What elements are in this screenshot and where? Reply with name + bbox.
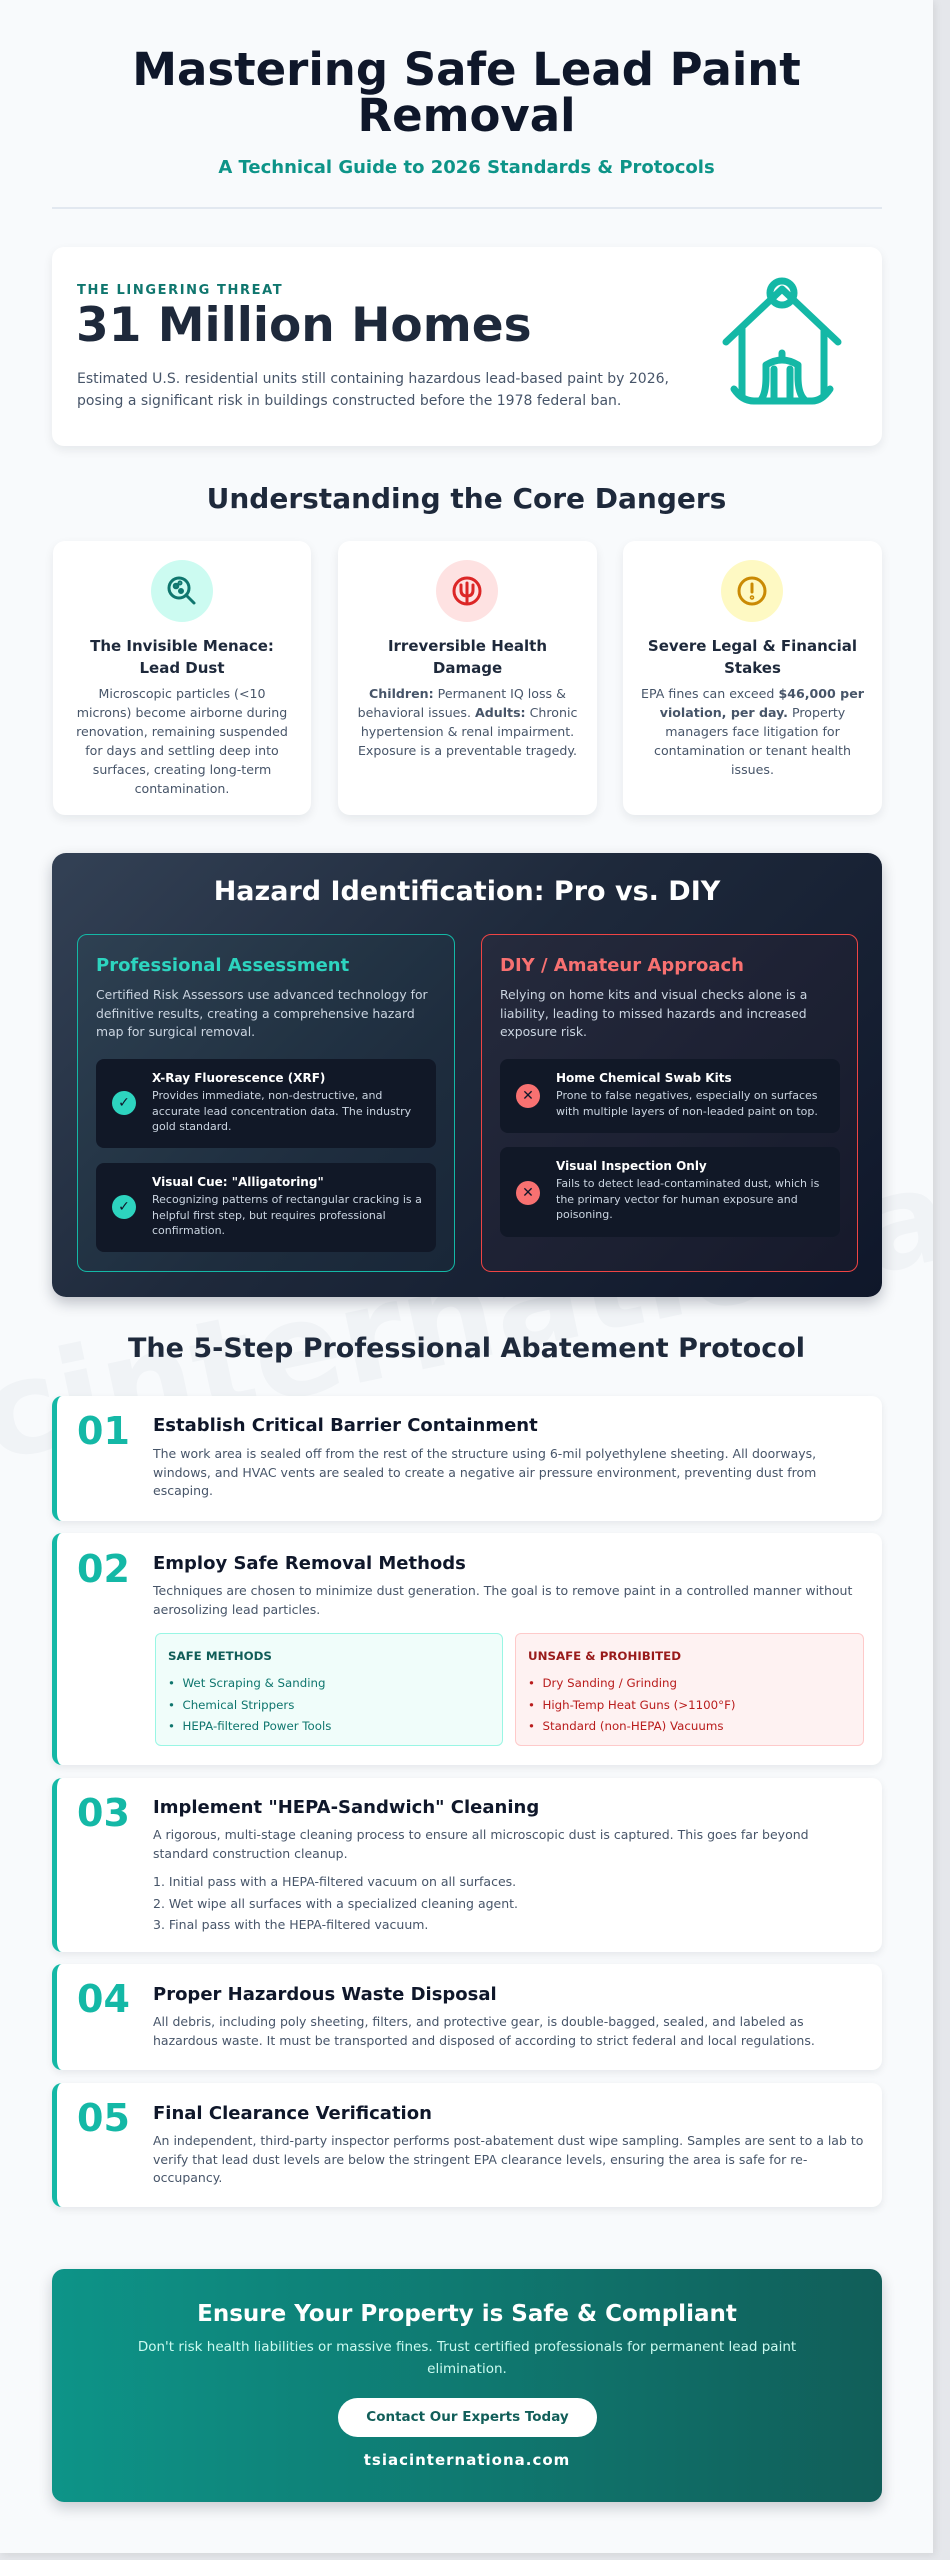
item: swab kits: ✕: [522, 1088, 534, 1104]
panel: threat stat: [52, 247, 882, 446]
step 01: Establish Critical Barrier Containment: [153, 1415, 538, 1436]
step 02: [52, 1533, 882, 1765]
item: XRF: ✓: [118, 1095, 130, 1111]
icon: house: [722, 278, 842, 404]
title: [132, 43, 801, 142]
subtitle: A Technical Guide to 2026 Standards & Protocols: [218, 157, 715, 178]
step 05: 05: [77, 2096, 130, 2140]
step 04: All debris, including poly sheeting, filters, and protective gear, is double-bagged, sealed, and labeled as hazardous waste. It must be transported and disposed of according to strict federal and local regulations.: [153, 2014, 815, 2048]
button: Contact Our Experts Today: [366, 2409, 569, 2425]
step 02: Employ Safe Removal Methods: [153, 1553, 466, 1574]
item: visual inspection: Fails to detect lead-contaminated dust, which is the primary vector for human exposure and poisoning.: [556, 1177, 819, 1221]
step 03: [52, 1778, 882, 1952]
column: DIY: [481, 934, 858, 1272]
title: The Invisible Menace:: [90, 637, 274, 655]
step 02: Techniques are chosen to minimize dust generation. The goal is to remove paint in a controlled manner without aerosolizing lead particles.: [153, 1583, 852, 1617]
panel: hazard identification: [52, 853, 882, 1297]
title: Mastering Safe Lead Paint: [132, 43, 801, 96]
label: THE LINGERING THREAT: [77, 283, 283, 298]
box: unsafe methods: • Dry Sanding / Grinding: [528, 1676, 677, 1690]
url: tsiacinternationa.com: [364, 2451, 570, 2469]
step 04: 04: [77, 1977, 130, 2021]
box: safe methods: • Wet Scraping & Sanding: [168, 1676, 325, 1690]
box: safe methods: SAFE METHODS: [168, 1649, 272, 1663]
title: [90, 637, 274, 677]
title: Damage: [433, 659, 502, 677]
item: alligatoring: [96, 1163, 436, 1252]
item: visual inspection: [500, 1147, 840, 1237]
item: visual inspection: ✕: [522, 1185, 534, 1201]
step 03: 03: [77, 1791, 130, 1835]
title: Severe Legal & Financial: [648, 637, 857, 655]
step 03: 2. Wet wipe all surfaces with a specialized cleaning agent.: [153, 1896, 518, 1911]
title: Irreversible Health: [388, 637, 547, 655]
item: alligatoring: ✓: [118, 1199, 130, 1215]
item: XRF: Provides immediate, non-destructive, and accurate lead concentration data. The industry gold standard.: [152, 1089, 411, 1133]
title: [648, 637, 857, 677]
item: swab kits: Home Chemical Swab Kits: [556, 1071, 732, 1085]
title: Stakes: [724, 659, 781, 677]
step 01: [52, 1396, 882, 1521]
text: Certified Risk Assessors use advanced technology for definitive results, creating a comprehensive hazard map for surgical removal.: [96, 987, 428, 1039]
box: safe methods: • HEPA-filtered Power Tools: [168, 1719, 331, 1733]
item: visual inspection: Visual Inspection Only: [556, 1159, 707, 1173]
box: unsafe methods: UNSAFE & PROHIBITED: [528, 1649, 681, 1663]
description: Estimated U.S. residential units still containing hazardous lead-based paint by 2026, posing a significant risk in buildings constructed before the 1978 federal ban.: [77, 371, 669, 409]
item: XRF: [96, 1059, 436, 1148]
icon: magnifier: [151, 560, 213, 622]
step 03: 1. Initial pass with a HEPA-filtered vacuum on all surfaces.: [153, 1874, 516, 1889]
heading: core dangers: Understanding the Core Dangers: [207, 482, 726, 515]
call to action: [52, 2269, 882, 2502]
title: [388, 637, 547, 677]
button: [338, 2398, 597, 2437]
step 05: An independent, third-party inspector performs post-abatement dust wipe sampling. Samples are sent to a lab to verify that lead dust levels are below the stringent EPA clearance levels, ensuring the area is safe for re-occupancy.: [153, 2133, 863, 2185]
step 02: 02: [77, 1547, 130, 1591]
CTA text: Don't risk health liabilities or massive fines. Trust certified professionals for permanent lead paint elimination.: [138, 2339, 796, 2377]
box: unsafe methods: • High-Temp Heat Guns (>1100°F): [528, 1698, 735, 1712]
step 01: The work area is sealed off from the rest of the structure using 6-mil polyethylene sheeting. All doorways, windows, and HVAC vents are sealed to create a negative air pressure environment, preventing dust from escaping.: [153, 1446, 816, 1498]
item: swab kits: Prone to false negatives, especially on surfaces with multiple layers of non-leaded paint on top.: [556, 1089, 818, 1118]
step 03: Implement "HEPA-Sandwich" Cleaning: [153, 1797, 539, 1818]
heading: DIY / Amateur Approach: [500, 955, 744, 976]
panel: legal stakes: [623, 541, 882, 815]
step 04: Proper Hazardous Waste Disposal: [153, 1984, 497, 2005]
title: Lead Dust: [139, 659, 225, 677]
icon: health: [436, 560, 498, 622]
step 05: [52, 2083, 882, 2207]
step 05: Final Clearance Verification: [153, 2103, 432, 2124]
text: Relying on home kits and visual checks alone is a liability, leading to missed hazards and increased exposure risk.: [500, 987, 807, 1039]
column: professional: [77, 934, 455, 1272]
item: swab kits: [500, 1059, 840, 1133]
text: EPA fines can exceed $46,000 per violation, per day. Property managers face litigation for contamination or tenant health issues.: [641, 686, 864, 777]
CTA heading: Ensure Your Property is Safe & Compliant: [197, 2301, 737, 2327]
icon: warning: [721, 560, 783, 622]
box: unsafe methods: • Standard (non-HEPA) Vacuums: [528, 1719, 723, 1733]
item: alligatoring: Recognizing patterns of rectangular cracking is a helpful first step, but requires professional confirmation.: [152, 1193, 422, 1237]
item: alligatoring: Visual Cue: "Alligatoring": [152, 1175, 324, 1189]
text: Microscopic particles (<10 microns) become airborne during renovation, remaining suspended for days and settling deep into surfaces, creating long-term contamination.: [76, 686, 288, 796]
text: Children: Permanent IQ loss & behavioral issues. Adults: Chronic hypertension & renal impairment. Exposure is a preventable tragedy.: [358, 686, 577, 758]
panel: invisible menace: [53, 541, 311, 815]
step 03: 3. Final pass with the HEPA-filtered vacuum.: [153, 1917, 428, 1932]
heading: Professional Assessment: [96, 955, 349, 976]
big number: 31 Million Homes: [76, 298, 532, 353]
step 03: A rigorous, multi-stage cleaning process to ensure all microscopic dust is captured. This goes far beyond standard construction cleanup.: [153, 1827, 809, 1861]
box: unsafe methods: [515, 1633, 864, 1746]
box: safe methods: [155, 1633, 503, 1746]
heading: Hazard Identification: Pro vs. DIY: [214, 876, 720, 907]
step 01: 01: [77, 1409, 130, 1453]
title: Removal: [357, 89, 576, 142]
box: safe methods: • Chemical Strippers: [168, 1698, 294, 1712]
item: XRF: X-Ray Fluorescence (XRF): [152, 1071, 325, 1085]
panel: health damage: [338, 541, 597, 815]
step 04: [52, 1964, 882, 2070]
heading: 5-step protocol: The 5-Step Professional Abatement Protocol: [128, 1333, 805, 1364]
